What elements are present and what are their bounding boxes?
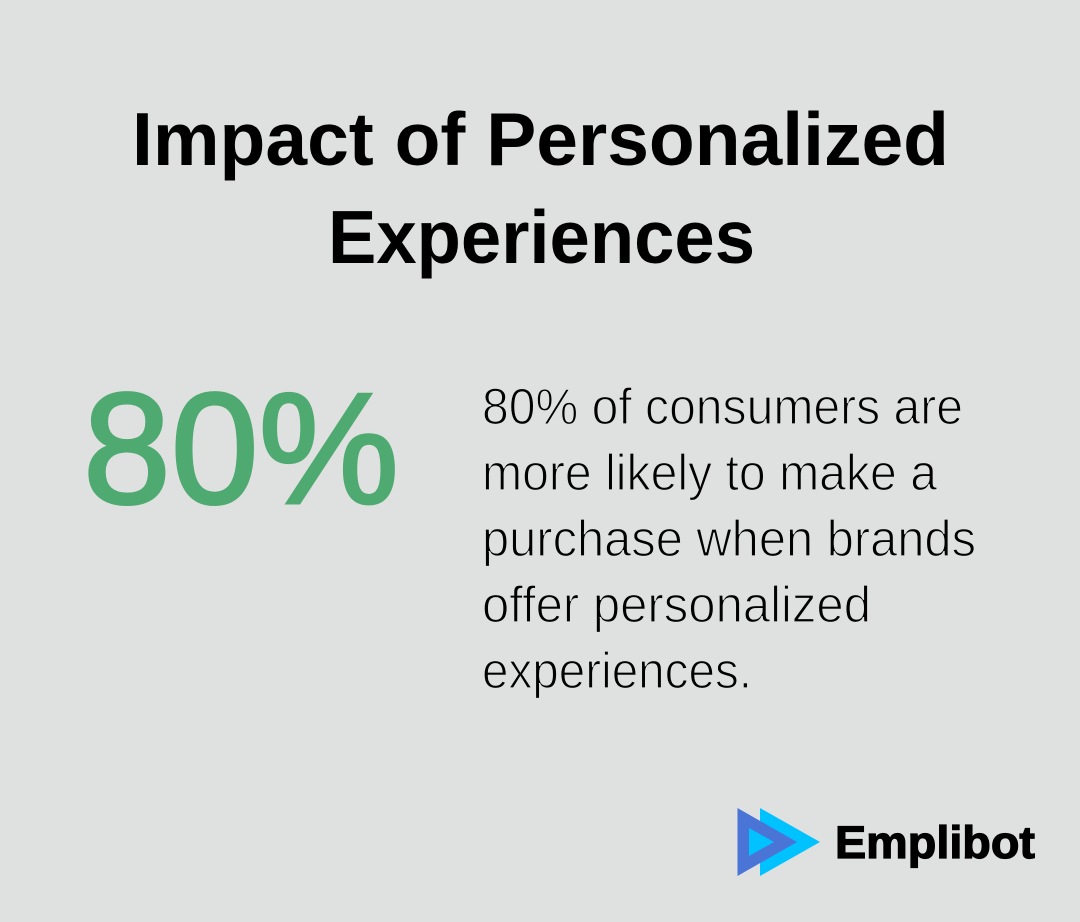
description text: offer personalized (482, 576, 871, 633)
description text: purchase when brands (482, 510, 976, 567)
description text: 80% of consumers are (482, 378, 963, 435)
description text: more likely to make a (482, 444, 938, 501)
logo wordmark: Emplibot (835, 817, 1035, 868)
description text (482, 378, 976, 699)
logo: Emplibot (738, 808, 1035, 876)
icon: play triangles (738, 808, 820, 876)
title (132, 97, 949, 279)
title: Impact of Personalized (132, 97, 949, 181)
big statistic: 80%: 80% (83, 361, 399, 537)
description text: experiences. (482, 642, 752, 699)
title: Experiences (328, 195, 755, 279)
